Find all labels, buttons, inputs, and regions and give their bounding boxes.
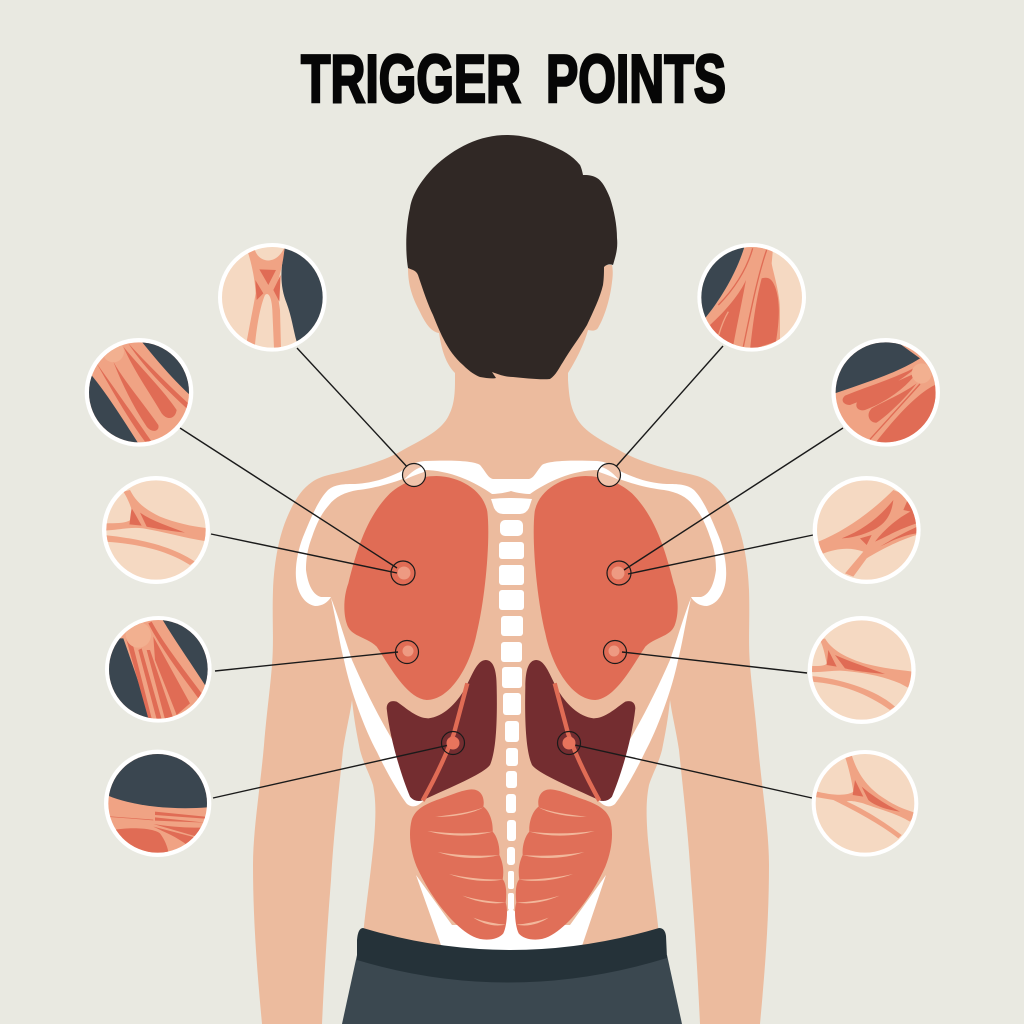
marker: right upper trapezius (598, 464, 620, 486)
detail circle: right 1 (690, 243, 807, 353)
title: TRIGGER (301, 41, 521, 117)
left lower back muscle (387, 660, 497, 801)
body silhouette (253, 265, 769, 1024)
left abdominal muscle (410, 789, 507, 940)
white clavicle and shoulder blade outline, left (296, 461, 511, 606)
right shoulder muscle (534, 476, 678, 700)
detail circle: right 5 (812, 750, 920, 858)
pants (342, 955, 682, 1024)
marker: right lower shoulder (604, 640, 626, 664)
marker: left lower back (442, 732, 464, 754)
left shoulder muscle (344, 476, 488, 700)
waistband (357, 928, 667, 983)
trigger point markers (391, 464, 631, 754)
spine vertebrae (491, 498, 532, 910)
figure: human back (253, 135, 769, 1024)
white clavicle and shoulder blade outline, right (511, 461, 726, 606)
marker: right mid shoulder (607, 561, 631, 585)
detail circle: right 3 (813, 476, 922, 585)
white rib bands and lower back (331, 598, 691, 952)
detail circle: left 1 (218, 243, 333, 352)
detail circle: left 2 (80, 338, 195, 447)
marker: left upper trapezius (402, 464, 426, 486)
marker: left mid shoulder (391, 561, 415, 585)
detail circle: right 2 (831, 337, 940, 447)
hair (406, 135, 617, 379)
detail circle: left 3 (102, 476, 210, 585)
title: POINTS (546, 41, 726, 117)
leader lines (180, 346, 843, 798)
marker: right lower back (558, 732, 580, 754)
right abdominal muscle (515, 789, 612, 940)
detail circle: left 4 (103, 615, 215, 723)
detail circle: right 4 (808, 616, 917, 725)
marker: left lower shoulder (396, 640, 418, 664)
detail circle: left 5 (104, 750, 212, 858)
right lower back muscle (525, 660, 635, 801)
